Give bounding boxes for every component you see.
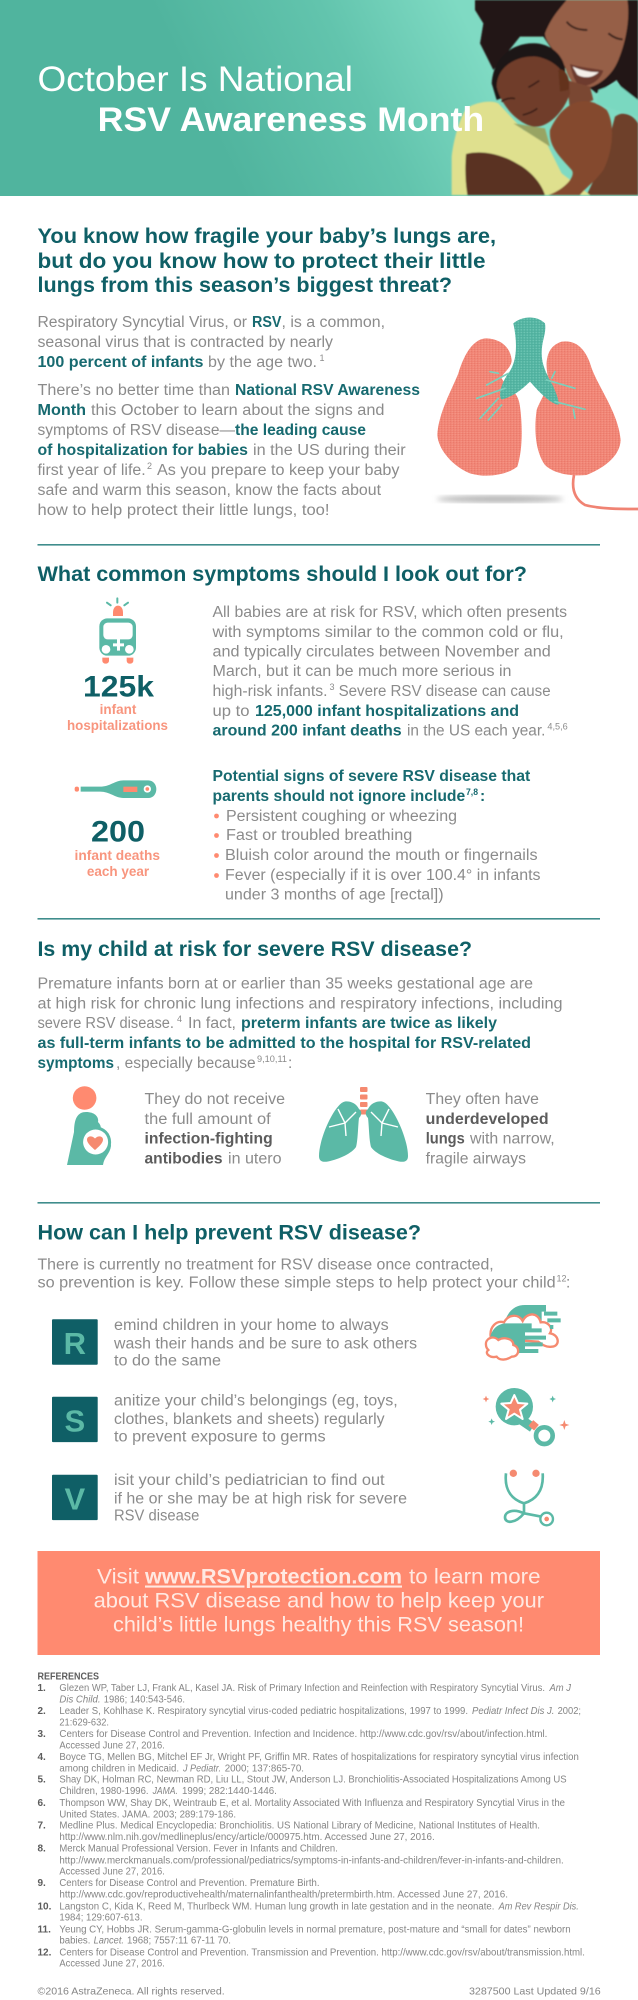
callout banner: child’s little lungs healthy this RSV season!: [113, 1614, 524, 1637]
risk paragraph: 4: [177, 1014, 182, 1024]
risk paragraph: 9,10,11: [257, 1054, 287, 1064]
icon: stethoscope: [505, 1470, 553, 1525]
references: Yeung CY, Hobbs JR. Serum-gamma-G-globulin levels in normal premature, post-mature and “small for dates” newborn: [59, 1924, 571, 1935]
severe signs bullet list: Fast or troubled breathing: [226, 827, 412, 844]
references: Dis Child.: [59, 1694, 100, 1705]
step S: anitize your child’s belongings (eg, toys,: [114, 1393, 398, 1410]
callout banner: Visit: [97, 1566, 139, 1588]
symptoms paragraph: [211, 604, 568, 740]
references: Accessed June 27, 2016.: [59, 1959, 165, 1970]
icon: washing hands: [486, 1305, 561, 1360]
references: 5.: [38, 1775, 46, 1786]
severe signs bullet list: Fever (especially if it is over 100.4° in infants: [225, 867, 541, 884]
text: antibodies: antibodies: [144, 1150, 222, 1167]
risk paragraph: , especially because: [116, 1055, 256, 1072]
step S: [52, 1393, 398, 1446]
symptoms paragraph: All babies are at risk for RSV, which often presents: [212, 604, 567, 621]
step S: to prevent exposure to germs: [114, 1429, 326, 1446]
step R: wash their hands and be sure to ask others: [113, 1335, 417, 1352]
references: 3.: [38, 1729, 46, 1740]
prevention intro: so prevention is key. Follow these simple steps to help protect your child: [38, 1274, 556, 1292]
references: 1999; 282:1440-1446.: [182, 1786, 277, 1797]
references: Boyce TG, Mellen BG, Mitchel EF Jr, Wright PF, Griffin MR. Rates of hospitalizations for respiratory syncytial virus infection: [59, 1752, 579, 1763]
intro paragraph 2: symptoms of RSV disease—: [38, 422, 235, 439]
references: JAMA.: [152, 1786, 178, 1797]
callout banner: www.RSVprotection.com: [144, 1566, 402, 1588]
intro heading: lungs from this season’s biggest threat?: [38, 273, 452, 297]
text: underdeveloped lungs: They often have: [426, 1091, 539, 1108]
risk paragraph: symptoms: [38, 1055, 114, 1072]
icon: baby rattle with sparkles: [483, 1388, 569, 1444]
references: Centers for Disease Control and Prevention. Infection and Incidence. http://www.cdc.gov/rsv/about/infection.html.: [59, 1729, 547, 1740]
intro paragraph 2: There’s no better time than: [38, 382, 230, 399]
risk paragraph: In fact,: [188, 1015, 236, 1032]
references: 21:629-632.: [59, 1717, 109, 1728]
references: United States. JAMA. 2003; 289:179-186.: [59, 1809, 236, 1820]
intro paragraph 2: National RSV Awareness: [235, 382, 420, 399]
header banner: [0, 0, 638, 196]
references: 9.: [38, 1878, 46, 1889]
intro paragraph 1: 1: [320, 353, 325, 363]
risk paragraph: [38, 976, 562, 1072]
icon: lungs: [319, 1087, 408, 1162]
severe signs heading: :: [480, 788, 485, 805]
symptoms paragraph: high-risk infants.: [212, 683, 328, 700]
risk heading: Is my child at risk for severe RSV disease?: [38, 937, 472, 961]
prevention intro: [38, 1256, 570, 1292]
symptoms paragraph: 3: [330, 682, 335, 692]
intro paragraph 2: first year of life.: [38, 462, 146, 479]
step S: S: [64, 1404, 85, 1438]
callout banner: to learn more: [409, 1566, 540, 1588]
section divider 3: [38, 1202, 600, 1204]
intro paragraph 2: in the US during their: [253, 442, 406, 459]
references: http://www.nlm.nih.gov/medlineplus/ency/article/000975.htm. Accessed June 27, 2016.: [59, 1832, 435, 1843]
text: antibodies: [144, 1091, 285, 1167]
references: 1984; 129:607-613.: [59, 1913, 142, 1924]
step R: [52, 1317, 417, 1370]
title: October Is National: [38, 60, 353, 99]
references: Glezen WP, Taber LJ, Frank AL, Kasel JA. Risk of Primary Infection and Reinfection with Respiratory Syncytial Virus.: [59, 1683, 545, 1694]
stat: 125k infant hospitalizations: 125k: [83, 670, 154, 704]
intro paragraph 2: 2: [147, 461, 152, 471]
symptoms paragraph: in the US each year.: [407, 722, 545, 740]
copyright footer: ©2016 AstraZeneca. All rights reserved.: [38, 1985, 225, 1997]
risk paragraph: :: [288, 1055, 292, 1072]
symptoms paragraph: Severe RSV disease can cause: [339, 683, 551, 700]
step V: RSV disease: [114, 1508, 199, 1525]
references: 8.: [38, 1844, 46, 1855]
stat: 125k infant hospitalizations: infant: [100, 702, 137, 717]
step V: [52, 1472, 407, 1525]
symptoms paragraph: 125,000 infant hospitalizations and: [255, 703, 519, 720]
crocheted lungs image: [437, 317, 638, 509]
intro paragraph 2: [38, 382, 420, 519]
intro paragraph 1: seasonal virus that is contracted by nearly: [38, 334, 333, 351]
references: 1.: [38, 1683, 46, 1694]
prevention intro: There is currently no treatment for RSV disease once contracted,: [38, 1256, 494, 1274]
icon: ambulance: [99, 598, 136, 664]
intro paragraph 1: [38, 314, 385, 371]
references: Leader S, Kohlhase K. Respiratory syncytial virus-coded pediatric hospitalizations, 1997 to 1999.: [59, 1706, 468, 1717]
title: [38, 60, 484, 139]
step R: to do the same: [114, 1353, 221, 1370]
copyright footer: [38, 1985, 601, 1997]
references: 11.: [38, 1924, 51, 1935]
intro paragraph 1: RSV: [252, 314, 282, 331]
symptoms paragraph: 4,5,6: [547, 722, 568, 732]
step S: clothes, blankets and sheets) regularly: [114, 1411, 385, 1428]
intro paragraph 1: Respiratory Syncytial Virus, or: [38, 314, 247, 331]
risk paragraph: at high risk for chronic lung infections and respiratory infections, including: [38, 996, 562, 1012]
step V: if he or she may be at high risk for severe: [114, 1490, 407, 1507]
references: Accessed June 27, 2016.: [59, 1740, 165, 1751]
references: babies.: [59, 1936, 90, 1947]
references: 1986; 140:543-546.: [104, 1694, 185, 1705]
stat: 200 infant deaths: each year: [87, 864, 150, 879]
severe signs heading: parents should not ignore include: [212, 788, 466, 805]
step R: R: [64, 1326, 86, 1361]
references: http://www.merckmanuals.com/professional/pediatrics/symptoms-in-infants-and-children/fever-in-infants-and-children.: [59, 1855, 564, 1866]
severe signs heading: [212, 768, 530, 805]
severe signs bullet list: Bluish color around the mouth or fingernails: [225, 847, 538, 864]
severe signs bullet list: [214, 808, 541, 904]
risk paragraph: as full-term infants to be admitted to the hospital for RSV-related: [38, 1035, 531, 1052]
references: Langston C, Kida K, Reed M, Thurlbeck WM. Human lung growth in late gestation and in the neonate.: [59, 1901, 495, 1912]
step R: emind children in your home to always: [114, 1317, 389, 1334]
references: 7.: [38, 1821, 46, 1832]
references: Merck Manual Professional Version. Fever in Infants and Children.: [59, 1844, 338, 1855]
icon: thermometer: [75, 780, 156, 798]
severe signs heading: Potential signs of severe RSV disease that: [212, 768, 530, 785]
references: 2000; 137:865-70.: [225, 1763, 304, 1774]
references: Children, 1980-1996.: [59, 1786, 149, 1797]
intro paragraph 2: As you prepare to keep your baby: [157, 462, 400, 479]
references: Am Rev Respir Dis.: [498, 1901, 579, 1912]
symptoms paragraph: and typically circulates between November and: [212, 644, 551, 660]
symptoms paragraph: March, but it can be much more serious in: [212, 663, 512, 680]
risk paragraph: preterm infants are twice as likely: [241, 1015, 497, 1032]
references: 1968; 7557:11 67-11 70.: [127, 1936, 231, 1947]
section divider 1: [38, 544, 600, 546]
risk paragraph: severe RSV disease.: [38, 1015, 174, 1032]
references: http://www.cdc.gov/reproductivehealth/maternalinfanthealth/pretermbirth.htm. Accessed June 27, 2016.: [59, 1890, 508, 1901]
intro paragraph 1: , is a common,: [282, 314, 385, 331]
step V: V: [64, 1482, 85, 1516]
intro paragraph 1: by the age two.: [208, 354, 317, 371]
intro paragraph 2: of hospitalization for babies: [38, 442, 248, 459]
text: underdeveloped lungs: fragile airways: [426, 1150, 526, 1167]
references: 4.: [38, 1752, 46, 1763]
references: Medline Plus. Medical Encyclopedia: Bronchiolitis. US National Library of Medicine, National Institutes of Health.: [59, 1821, 540, 1832]
text: antibodies: infection-fighting: [144, 1131, 273, 1148]
prevention heading: How can I help prevent RSV disease?: [38, 1220, 421, 1244]
prevention intro: :: [566, 1274, 570, 1292]
stat: 125k infant hospitalizations: hospitalizations: [67, 718, 168, 733]
prevention intro: 12: [556, 1274, 567, 1284]
text: underdeveloped lungs: [426, 1091, 555, 1167]
intro heading: [38, 224, 496, 297]
intro heading: but do you know how to protect their little: [38, 249, 486, 273]
stat: 125k infant hospitalizations: [67, 670, 168, 733]
references: Lancet.: [94, 1936, 124, 1947]
text: antibodies: They do not receive: [144, 1091, 285, 1108]
references: 2.: [38, 1706, 46, 1717]
references: Centers for Disease Control and Prevention. Transmission and Prevention. http://www.cdc.gov/rsv/about/transmission.html.: [59, 1947, 585, 1958]
references: REFERENCES: [38, 1672, 99, 1682]
severe signs heading: 7,8: [466, 787, 478, 797]
symptoms heading: What common symptoms should I look out for?: [38, 562, 527, 586]
intro heading: You know how fragile your baby’s lungs are,: [38, 224, 496, 248]
text: underdeveloped lungs: underdeveloped: [426, 1111, 549, 1128]
severe signs bullet list: under 3 months of age [rectal]): [225, 886, 444, 904]
intro paragraph 1: 100 percent of infants: [38, 354, 204, 371]
step V: isit your child’s pediatrician to find out: [114, 1472, 385, 1489]
references: Accessed June 27, 2016.: [59, 1867, 165, 1878]
callout banner: about RSV disease and how to help keep your: [94, 1590, 544, 1613]
references: Centers for Disease Control and Prevention. Premature Birth.: [59, 1878, 320, 1889]
icon: pregnant mother: [67, 1086, 111, 1165]
callout banner: [38, 1551, 600, 1655]
references: Am J: [549, 1683, 572, 1694]
section divider 2: [38, 918, 600, 920]
symptoms paragraph: with symptoms similar to the common cold or flu,: [211, 624, 564, 641]
references: Thompson WW, Shay DK, Weintraub E, et al. Mortality Associated With Influenza and Respiratory Syncytial Virus in the: [59, 1798, 565, 1809]
references: Shay DK, Holman RC, Newman RD, Liu LL, Stout JW, Anderson LJ. Bronchiolitis-Associated Hospitalizations Among US: [59, 1775, 567, 1786]
copyright footer: 3287500 Last Updated 9/16: [469, 1985, 601, 1997]
photo: mother and sleeping baby: [452, 0, 638, 195]
intro paragraph 2: this October to learn about the signs and: [91, 402, 384, 419]
references: J Pediatr.: [182, 1763, 221, 1774]
text: underdeveloped lungs: lungs: [426, 1131, 465, 1148]
intro paragraph 2: the leading cause: [235, 422, 366, 439]
stat: 200 infant deaths: infant deaths: [75, 848, 160, 863]
text: antibodies: the full amount of: [144, 1111, 271, 1128]
intro paragraph 2: safe and warm this season, know the facts about: [38, 482, 382, 499]
title: RSV Awareness Month: [98, 101, 484, 139]
stat: 200 infant deaths: 200: [91, 816, 145, 848]
references: 2002;: [558, 1706, 581, 1717]
references: 10.: [38, 1901, 52, 1912]
references: among children in Medicaid.: [59, 1763, 179, 1774]
references: Pediatr Infect Dis J.: [472, 1706, 554, 1717]
risk paragraph: Premature infants born at or earlier than 35 weeks gestational age are: [38, 976, 533, 992]
references: [38, 1672, 585, 1970]
intro paragraph 2: how to help protect their little lungs, too!: [38, 502, 330, 519]
symptoms paragraph: up to: [212, 703, 250, 720]
symptoms paragraph: around 200 infant deaths: [212, 722, 402, 740]
references: 6.: [38, 1798, 46, 1809]
intro paragraph 2: Month: [38, 402, 86, 419]
references: 12.: [38, 1947, 52, 1958]
severe signs bullet list: Persistent coughing or wheezing: [226, 808, 457, 825]
stat: 200 infant deaths: [75, 816, 160, 879]
text: antibodies: in utero: [228, 1150, 282, 1167]
text: underdeveloped lungs: with narrow,: [469, 1131, 555, 1148]
